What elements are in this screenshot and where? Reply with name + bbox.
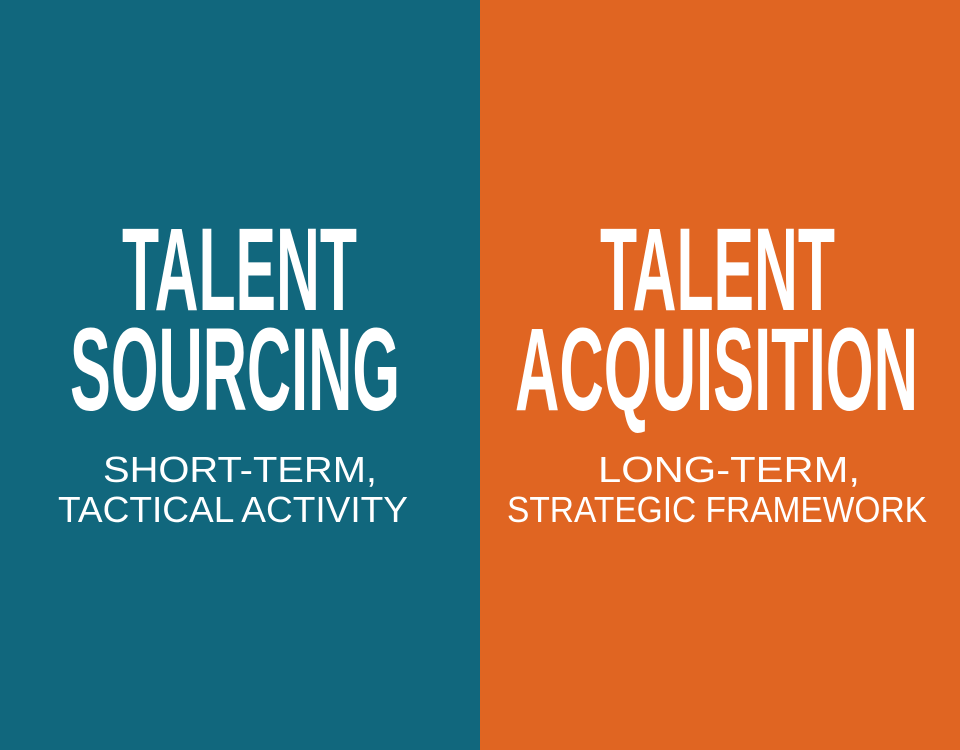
heading: talent acquisition [515,204,918,436]
heading: talent sourcing [70,204,400,436]
subtitle: short-term tactical activity: TACTICAL ACTIVITY [58,489,408,530]
panel: talent sourcing [0,0,480,750]
subtitle: long-term strategic framework: STRATEGIC FRAMEWORK [507,489,927,530]
panel: talent acquisition [480,0,960,750]
subtitle: long-term strategic framework [507,449,927,530]
heading: talent sourcing: SOURCING [70,304,400,436]
subtitle: short-term tactical activity [58,449,408,530]
heading: talent sourcing: TALENT [122,204,357,336]
subtitle: long-term strategic framework: LONG-TERM, [598,449,860,490]
subtitle: short-term tactical activity: SHORT-TERM, [103,449,377,490]
